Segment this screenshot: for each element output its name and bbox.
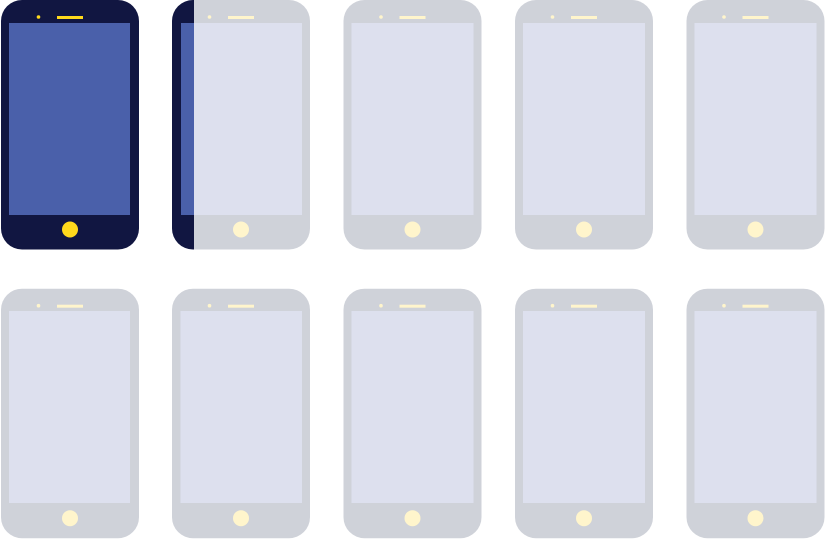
phone 5 — [686, 0, 824, 250]
phone 1 (filled) — [1, 0, 139, 250]
phone 9 — [515, 289, 653, 538]
phone 4 — [515, 0, 653, 250]
phone 6 — [1, 289, 139, 538]
phone 10 — [686, 289, 824, 538]
phone 2 filled sliver — [172, 0, 194, 250]
phone 2 (partially filled) — [172, 0, 310, 250]
phone 7 — [172, 289, 310, 538]
phone 2 base — [172, 0, 310, 250]
phone 8 — [344, 289, 482, 538]
phone 3 — [344, 0, 482, 250]
